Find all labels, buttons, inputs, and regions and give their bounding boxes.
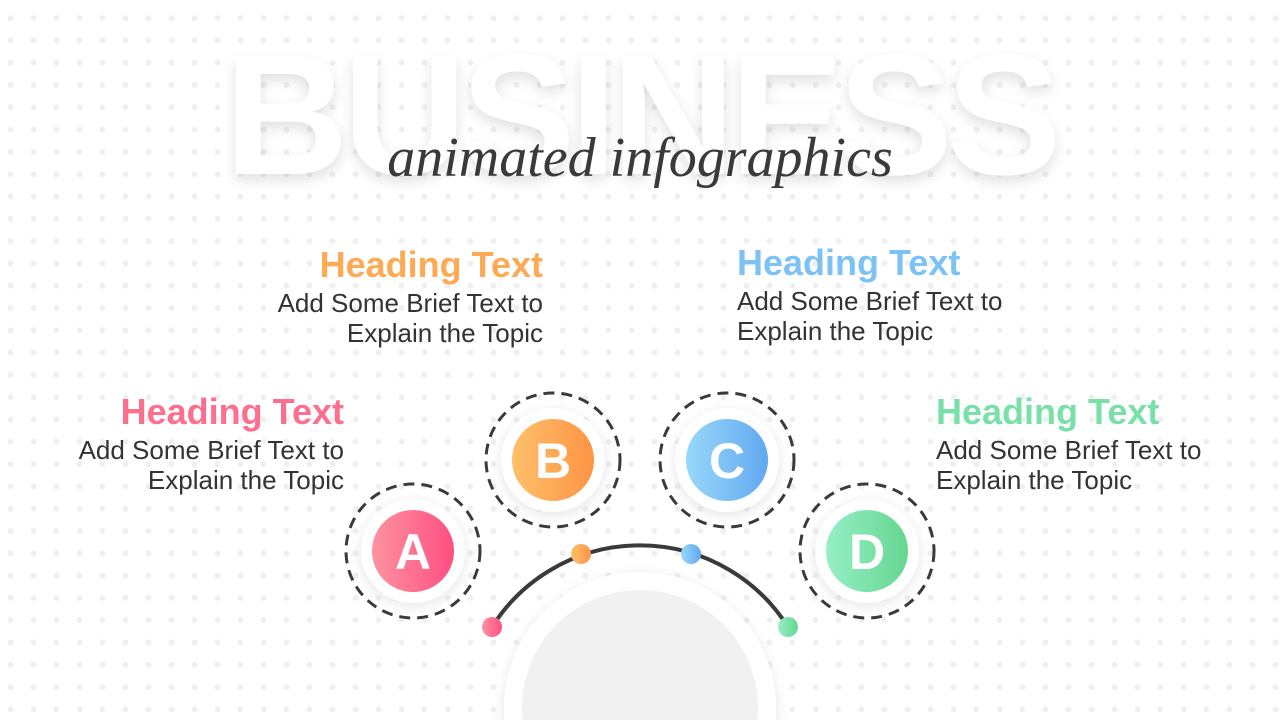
text block B (orange): Explain the Topic <box>347 318 543 348</box>
text block C (blue) <box>737 242 1002 346</box>
text block D (green): Heading Text <box>936 391 1159 432</box>
text block C (blue): Heading Text <box>737 242 960 283</box>
text block D (green): Explain the Topic <box>936 465 1132 495</box>
text block A (pink) <box>78 391 344 495</box>
circle D <box>800 484 934 618</box>
circle D: D <box>849 524 885 580</box>
title: BUSINESS: BUSINESS <box>224 19 1056 211</box>
circle A <box>346 484 480 618</box>
text block B (orange): Heading Text <box>320 244 543 285</box>
text block C (blue): Explain the Topic <box>737 316 933 346</box>
text block A (pink): Add Some Brief Text to <box>79 435 344 465</box>
circle B <box>486 393 620 527</box>
subtitle script: animated infographics <box>387 127 893 189</box>
text block D (green) <box>936 391 1201 495</box>
text block A (pink): Heading Text <box>121 391 344 432</box>
text block D (green): Add Some Brief Text to <box>936 435 1201 465</box>
circle C: C <box>709 433 745 489</box>
circle C <box>660 393 794 527</box>
circle B: B <box>535 433 571 489</box>
text block B (orange) <box>278 244 543 348</box>
text block C (blue): Add Some Brief Text to <box>737 286 1002 316</box>
text block B (orange): Add Some Brief Text to <box>278 288 543 318</box>
base semicircle <box>504 572 776 720</box>
arc connector <box>482 544 798 637</box>
text block A (pink): Explain the Topic <box>148 465 344 495</box>
circle A: A <box>395 524 431 580</box>
